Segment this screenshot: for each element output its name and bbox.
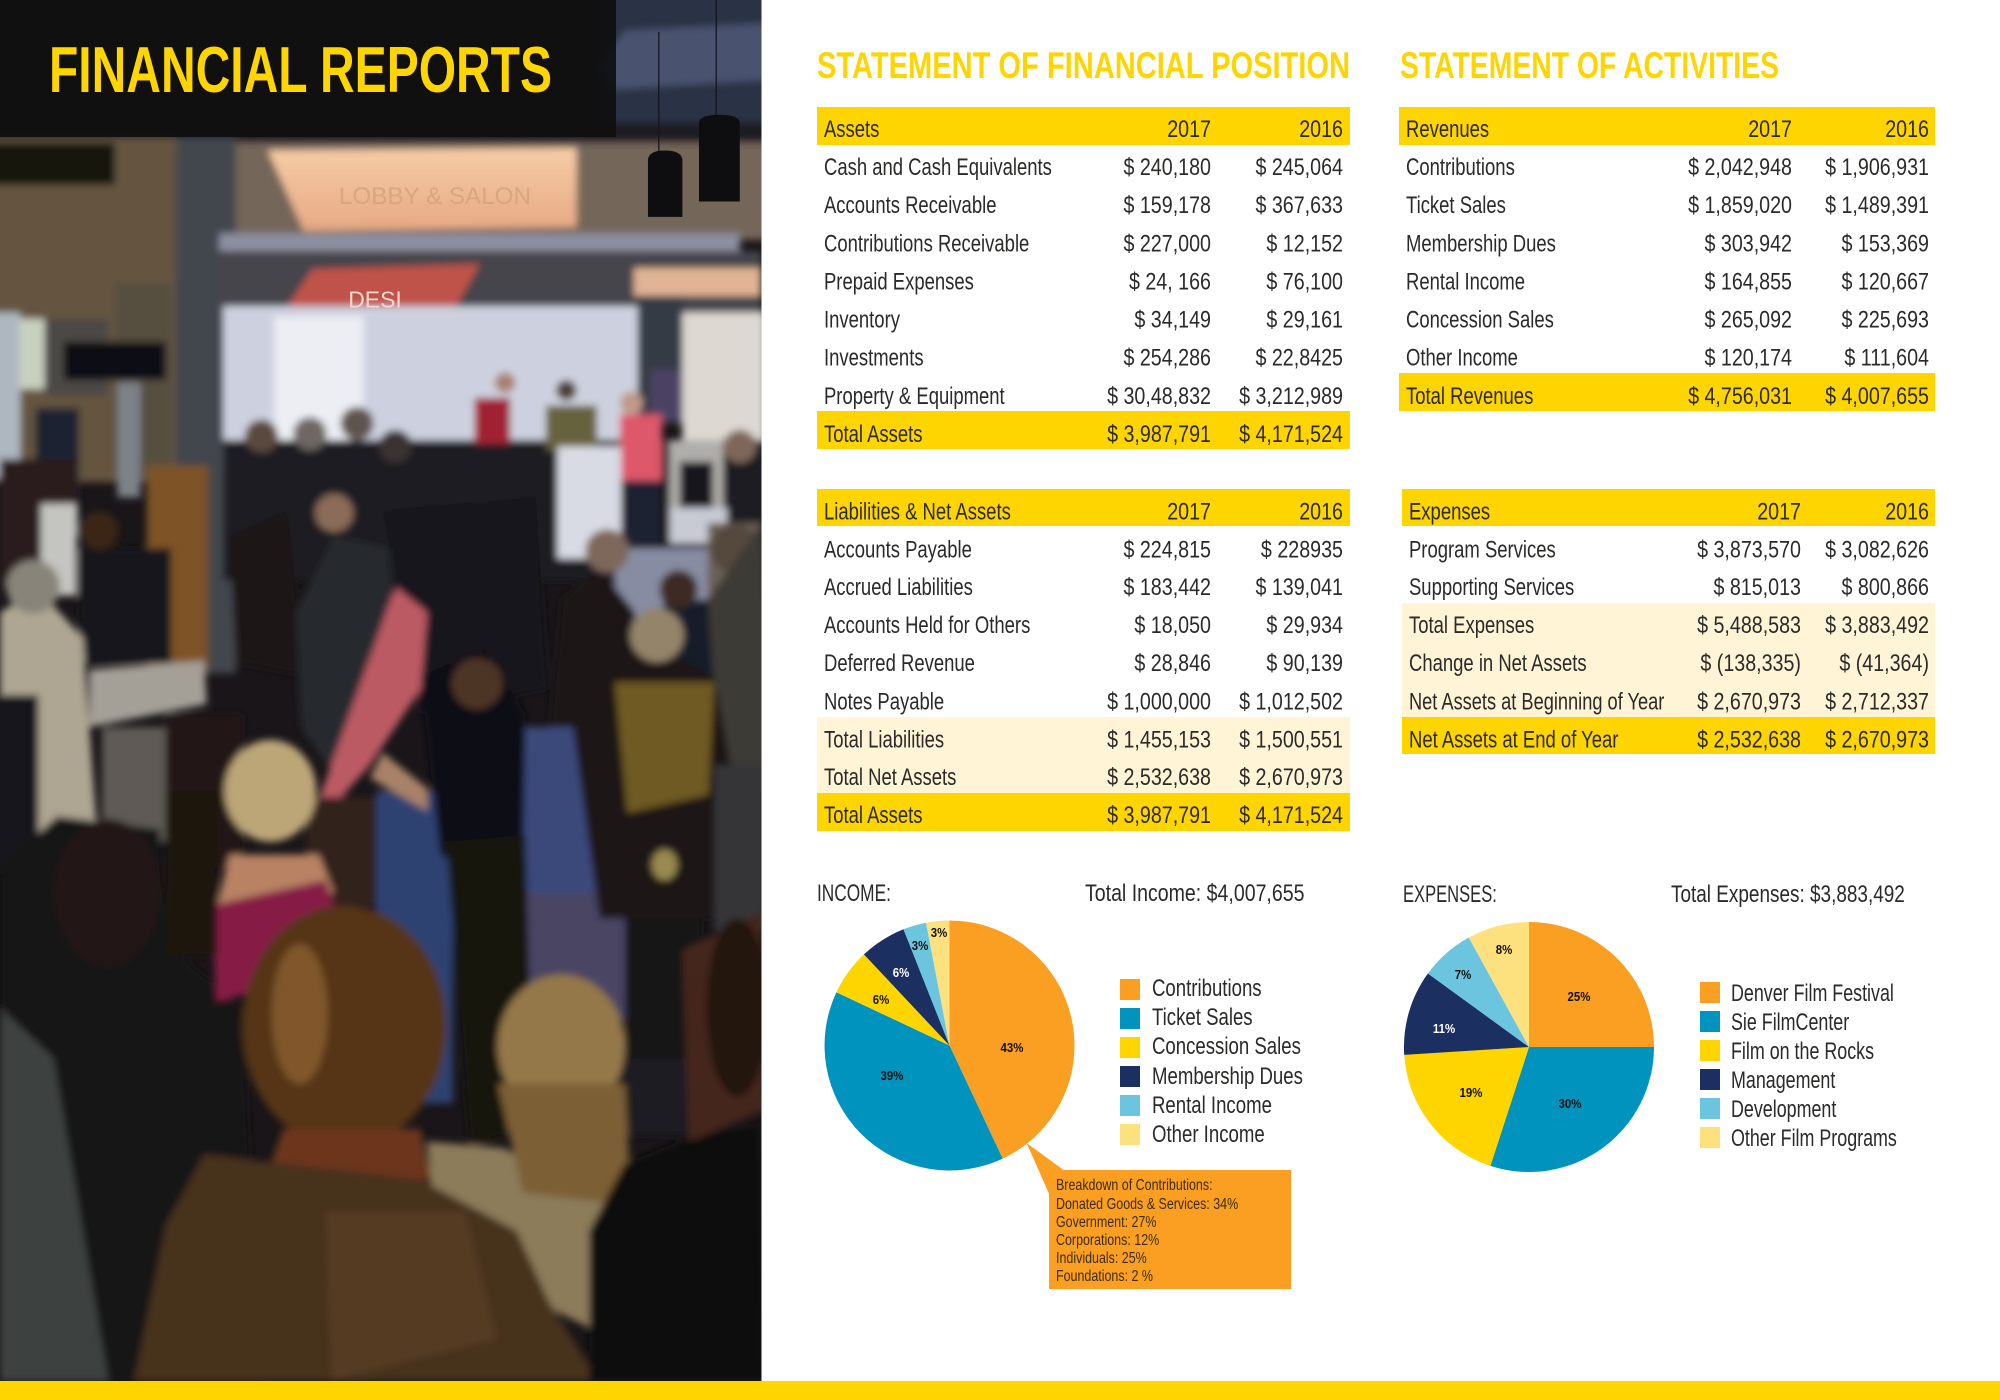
table: expenses: 2016 [1885, 498, 1929, 525]
table: assets: Cash and Cash Equivalents [824, 154, 1052, 181]
income legend: Ticket Sales [1152, 1004, 1253, 1031]
table: expenses: Supporting Services [1409, 574, 1574, 601]
table: revenues: $ 1,489,391 [1825, 191, 1929, 218]
table: revenues: $ 265,092 [1704, 306, 1792, 333]
bottom yellow bar [0, 1381, 2000, 1400]
table: liabilities and net assets: Accounts Held for Others [824, 612, 1030, 639]
table: liabilities and net assets: Accounts Payable [824, 536, 972, 563]
table: revenues: Total Revenues [1406, 383, 1533, 410]
table: revenues: $ 4,756,031 [1688, 382, 1792, 409]
table: expenses: $ 2,670,973 [1825, 726, 1929, 753]
table: revenues: Ticket Sales [1406, 192, 1506, 219]
table: liabilities and net assets: $ 228935 [1261, 536, 1343, 563]
income legend: Concession Sales [1152, 1033, 1301, 1060]
table: liabilities and net assets: $ 224,815 [1123, 536, 1211, 563]
table: revenues: $ 303,942 [1704, 230, 1792, 257]
table: revenues: 2016 [1885, 115, 1929, 142]
table: liabilities and net assets: $ 1,500,551 [1239, 726, 1343, 753]
table: assets: Prepaid Expenses [824, 268, 974, 295]
table: liabilities and net assets: Notes Payable [824, 688, 944, 715]
table: liabilities and net assets: $ 1,012,502 [1239, 688, 1343, 715]
table: assets: $ 76,100 [1266, 268, 1343, 295]
table: assets: $ 4,171,524 [1239, 420, 1343, 447]
income pie chart: 39% [881, 1068, 904, 1083]
table: revenues: 2017 [1748, 115, 1792, 142]
table: revenues: Membership Dues [1406, 230, 1556, 257]
expenses pie chart: 30% [1559, 1096, 1582, 1111]
expenses legend: Management [1731, 1068, 1835, 1094]
table: expenses: Program Services [1409, 536, 1556, 563]
income legend: Membership Dues [1152, 1063, 1303, 1090]
expenses chart heading: EXPENSES: [1403, 881, 1497, 908]
table: liabilities and net assets: Total Liabilities [824, 726, 944, 753]
table: expenses: $ (41,364) [1839, 649, 1929, 676]
table: liabilities and net assets: $ 183,442 [1123, 573, 1211, 600]
table: liabilities and net assets: $ 90,139 [1266, 649, 1343, 676]
table: assets: $ 22,8425 [1255, 344, 1343, 371]
table: assets: $ 367,633 [1255, 191, 1343, 218]
table: revenues: $ 120,667 [1841, 268, 1929, 295]
table: liabilities and net assets: Deferred Revenue [824, 650, 975, 677]
table: assets: $ 24, 166 [1129, 268, 1211, 295]
income pie chart: 3% [912, 938, 928, 953]
table: assets: $ 34,149 [1134, 306, 1211, 333]
expenses legend [1700, 981, 1897, 1152]
expenses pie chart: 19% [1460, 1085, 1483, 1100]
table: liabilities and net assets: $ 18,050 [1134, 611, 1211, 638]
table: liabilities and net assets: Accrued Liabilities [824, 574, 973, 601]
table: assets: $ 245,064 [1255, 153, 1343, 180]
table: revenues: Rental Income [1406, 268, 1525, 295]
table: revenues: Other Income [1406, 344, 1518, 371]
expenses pie chart: 25% [1568, 989, 1591, 1004]
table: expenses: $ 5,488,583 [1697, 611, 1801, 638]
table: assets: $ 227,000 [1123, 230, 1211, 257]
income legend: Other Income [1152, 1121, 1265, 1148]
expenses legend: Development [1731, 1097, 1836, 1123]
table: assets: Assets [824, 116, 879, 143]
table: assets: $ 3,987,791 [1107, 420, 1211, 447]
table: revenues: $ 153,369 [1841, 230, 1929, 257]
table: revenues: $ 2,042,948 [1688, 153, 1792, 180]
table: assets: $ 30,48,832 [1107, 382, 1211, 409]
expenses legend: Sie FilmCenter [1731, 1010, 1849, 1036]
table: assets: $ 3,212,989 [1239, 382, 1343, 409]
table: expenses: $ 815,013 [1713, 573, 1801, 600]
income pie chart [825, 920, 1074, 1170]
table: expenses [1402, 489, 1935, 754]
photo: crowd at film festival lobby [0, 0, 778, 1381]
table: revenues [1399, 107, 1935, 411]
table: expenses: Expenses [1409, 498, 1490, 525]
table: revenues: Contributions [1406, 154, 1515, 181]
table: revenues: Revenues [1406, 116, 1489, 143]
callout: breakdown of contributions [1027, 1143, 1291, 1289]
table: assets: Property & Equipment [824, 383, 1005, 410]
callout: breakdown of contributions: Individuals: 25% [1056, 1249, 1147, 1266]
expenses pie chart: 11% [1433, 1021, 1455, 1036]
expenses legend: Denver Film Festival [1731, 981, 1894, 1007]
heading: statement of activities: STATEMENT OF ACTIVITIES [1400, 45, 1779, 86]
table: expenses: $ 3,883,492 [1825, 611, 1929, 638]
table: liabilities and net assets: $ 1,455,153 [1107, 726, 1211, 753]
table: liabilities and net assets: Total Assets [824, 802, 923, 829]
table: liabilities and net assets: $ 4,171,524 [1239, 801, 1343, 828]
income pie chart: 6% [873, 992, 889, 1007]
table: expenses: Total Expenses [1409, 612, 1534, 639]
expenses pie chart: 8% [1496, 942, 1512, 957]
callout: breakdown of contributions: Corporations: 12% [1056, 1231, 1159, 1248]
table: assets: $ 159,178 [1123, 191, 1211, 218]
title band [0, 0, 616, 137]
table: liabilities and net assets: $ 3,987,791 [1107, 801, 1211, 828]
income pie chart: 43% [1001, 1040, 1024, 1055]
table: assets: Investments [824, 344, 924, 371]
table: expenses: $ 2,532,638 [1697, 726, 1801, 753]
table: expenses: Net Assets at Beginning of Year [1409, 688, 1664, 715]
table: expenses: $ 3,873,570 [1697, 536, 1801, 563]
table: expenses: 2017 [1757, 498, 1801, 525]
table: assets: Total Assets [824, 421, 923, 448]
expenses legend: Other Film Programs [1731, 1126, 1897, 1152]
total income: Total Income: $4,007,655 [1085, 879, 1304, 906]
callout: breakdown of contributions: Breakdown of Contributions: [1056, 1176, 1213, 1193]
table: liabilities and net assets: $ 28,846 [1134, 649, 1211, 676]
title: FINANCIAL REPORTS [49, 33, 552, 106]
table: assets: 2016 [1299, 115, 1343, 142]
table: assets: $ 254,286 [1123, 344, 1211, 371]
table: liabilities and net assets: Liabilities & Net Assets [824, 498, 1011, 525]
table: liabilities and net assets: $ 29,934 [1266, 611, 1343, 638]
income pie chart: 6% [893, 965, 909, 980]
table: liabilities and net assets: 2017 [1167, 498, 1211, 525]
table: revenues: $ 4,007,655 [1825, 382, 1929, 409]
table: liabilities and net assets: $ 2,670,973 [1239, 763, 1343, 790]
table: expenses: $ 2,712,337 [1825, 688, 1929, 715]
photo: crowd at film festival lobby: LOBBY & SALON [339, 183, 531, 210]
table: assets: $ 240,180 [1123, 153, 1211, 180]
callout: breakdown of contributions: Foundations: 2 % [1056, 1267, 1153, 1284]
table: liabilities and net assets [817, 489, 1350, 831]
total expenses: Total Expenses: $3,883,492 [1671, 880, 1905, 908]
table: expenses: $ (138,335) [1700, 649, 1801, 676]
table: assets [817, 107, 1350, 449]
table: liabilities and net assets: $ 139,041 [1255, 573, 1343, 600]
income pie chart: 3% [931, 925, 947, 940]
table: assets: Accounts Receivable [824, 192, 996, 219]
table: assets: $ 12,152 [1266, 230, 1343, 257]
callout: breakdown of contributions: Donated Goods & Services: 34% [1056, 1195, 1238, 1212]
table: revenues: $ 164,855 [1704, 268, 1792, 295]
expenses legend: Film on the Rocks [1731, 1039, 1874, 1065]
table: liabilities and net assets: 2016 [1299, 498, 1343, 525]
table: liabilities and net assets: $ 1,000,000 [1107, 688, 1211, 715]
table: revenues: Concession Sales [1406, 306, 1554, 333]
income legend: Rental Income [1152, 1092, 1272, 1119]
table: expenses: $ 2,670,973 [1697, 688, 1801, 715]
table: liabilities and net assets: $ 2,532,638 [1107, 763, 1211, 790]
expenses pie chart: 7% [1455, 967, 1471, 982]
table: assets: $ 29,161 [1266, 306, 1343, 333]
table: assets: 2017 [1167, 115, 1211, 142]
table: expenses: Change in Net Assets [1409, 650, 1587, 677]
photo: crowd at film festival lobby: DESI [348, 286, 402, 312]
income legend [1120, 975, 1303, 1148]
table: revenues: $ 111,604 [1844, 344, 1929, 371]
table: expenses: $ 800,866 [1841, 573, 1929, 600]
table: expenses: Net Assets at End of Year [1409, 726, 1618, 753]
table: expenses: $ 3,082,626 [1825, 536, 1929, 563]
table: revenues: $ 225,693 [1841, 306, 1929, 333]
table: revenues: $ 1,859,020 [1688, 191, 1792, 218]
income chart heading: INCOME: [817, 880, 891, 907]
table: liabilities and net assets: Total Net Assets [824, 764, 956, 791]
table: revenues: $ 1,906,931 [1825, 153, 1929, 180]
table: assets: Inventory [824, 306, 900, 333]
expenses pie chart [1404, 922, 1654, 1172]
table: assets: Contributions Receivable [824, 230, 1029, 257]
income legend: Contributions [1152, 975, 1262, 1002]
heading: statement of financial position: STATEMENT OF FINANCIAL POSITION [817, 45, 1350, 86]
callout: breakdown of contributions: Government: 27% [1056, 1213, 1156, 1230]
table: revenues: $ 120,174 [1704, 344, 1792, 371]
